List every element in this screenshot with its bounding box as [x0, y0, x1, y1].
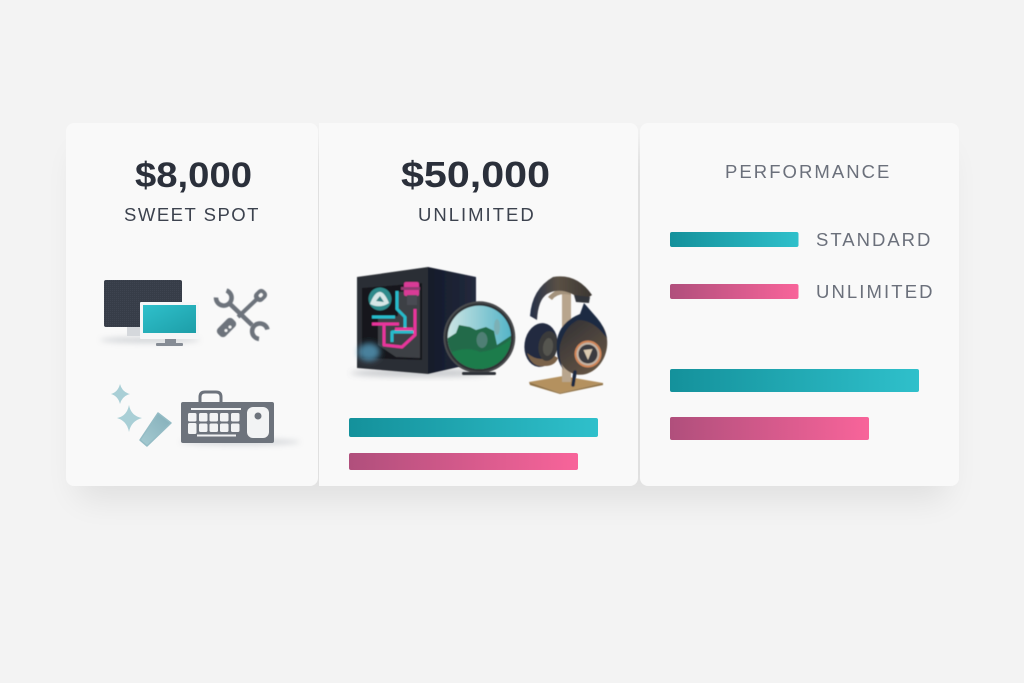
- bar: standard performance: [670, 369, 919, 392]
- price: $50,000: $50,000: [401, 154, 550, 195]
- heading: performance: PERFORMANCE: [725, 161, 891, 182]
- icon: monitors: [100, 280, 200, 346]
- price: $8,000: $8,000: [135, 156, 252, 195]
- legend: standard: STANDARD: [816, 229, 932, 250]
- bar: unlimited performance: [670, 417, 869, 440]
- legend: unlimited: [670, 281, 935, 302]
- panel: unlimited: [319, 123, 638, 486]
- icon: round lens display: [443, 301, 515, 375]
- panel: performance: [640, 123, 959, 486]
- icon: keyboard and mouse: [180, 392, 300, 445]
- bar: teal: [349, 418, 598, 437]
- icon: headphones on stand: [522, 276, 613, 394]
- label: unlimited: UNLIMITED: [418, 204, 536, 225]
- legend: standard: [670, 229, 932, 250]
- bar: pink: [349, 453, 578, 470]
- label: sweet spot: SWEET SPOT: [124, 204, 260, 225]
- icon: wrench and screwdriver: [215, 287, 269, 339]
- panel: sweet spot: [66, 123, 318, 486]
- icon: sparkles and brush: [111, 384, 171, 446]
- icon: liquid-cooled PC: [350, 267, 490, 377]
- legend: unlimited: UNLIMITED: [816, 281, 935, 302]
